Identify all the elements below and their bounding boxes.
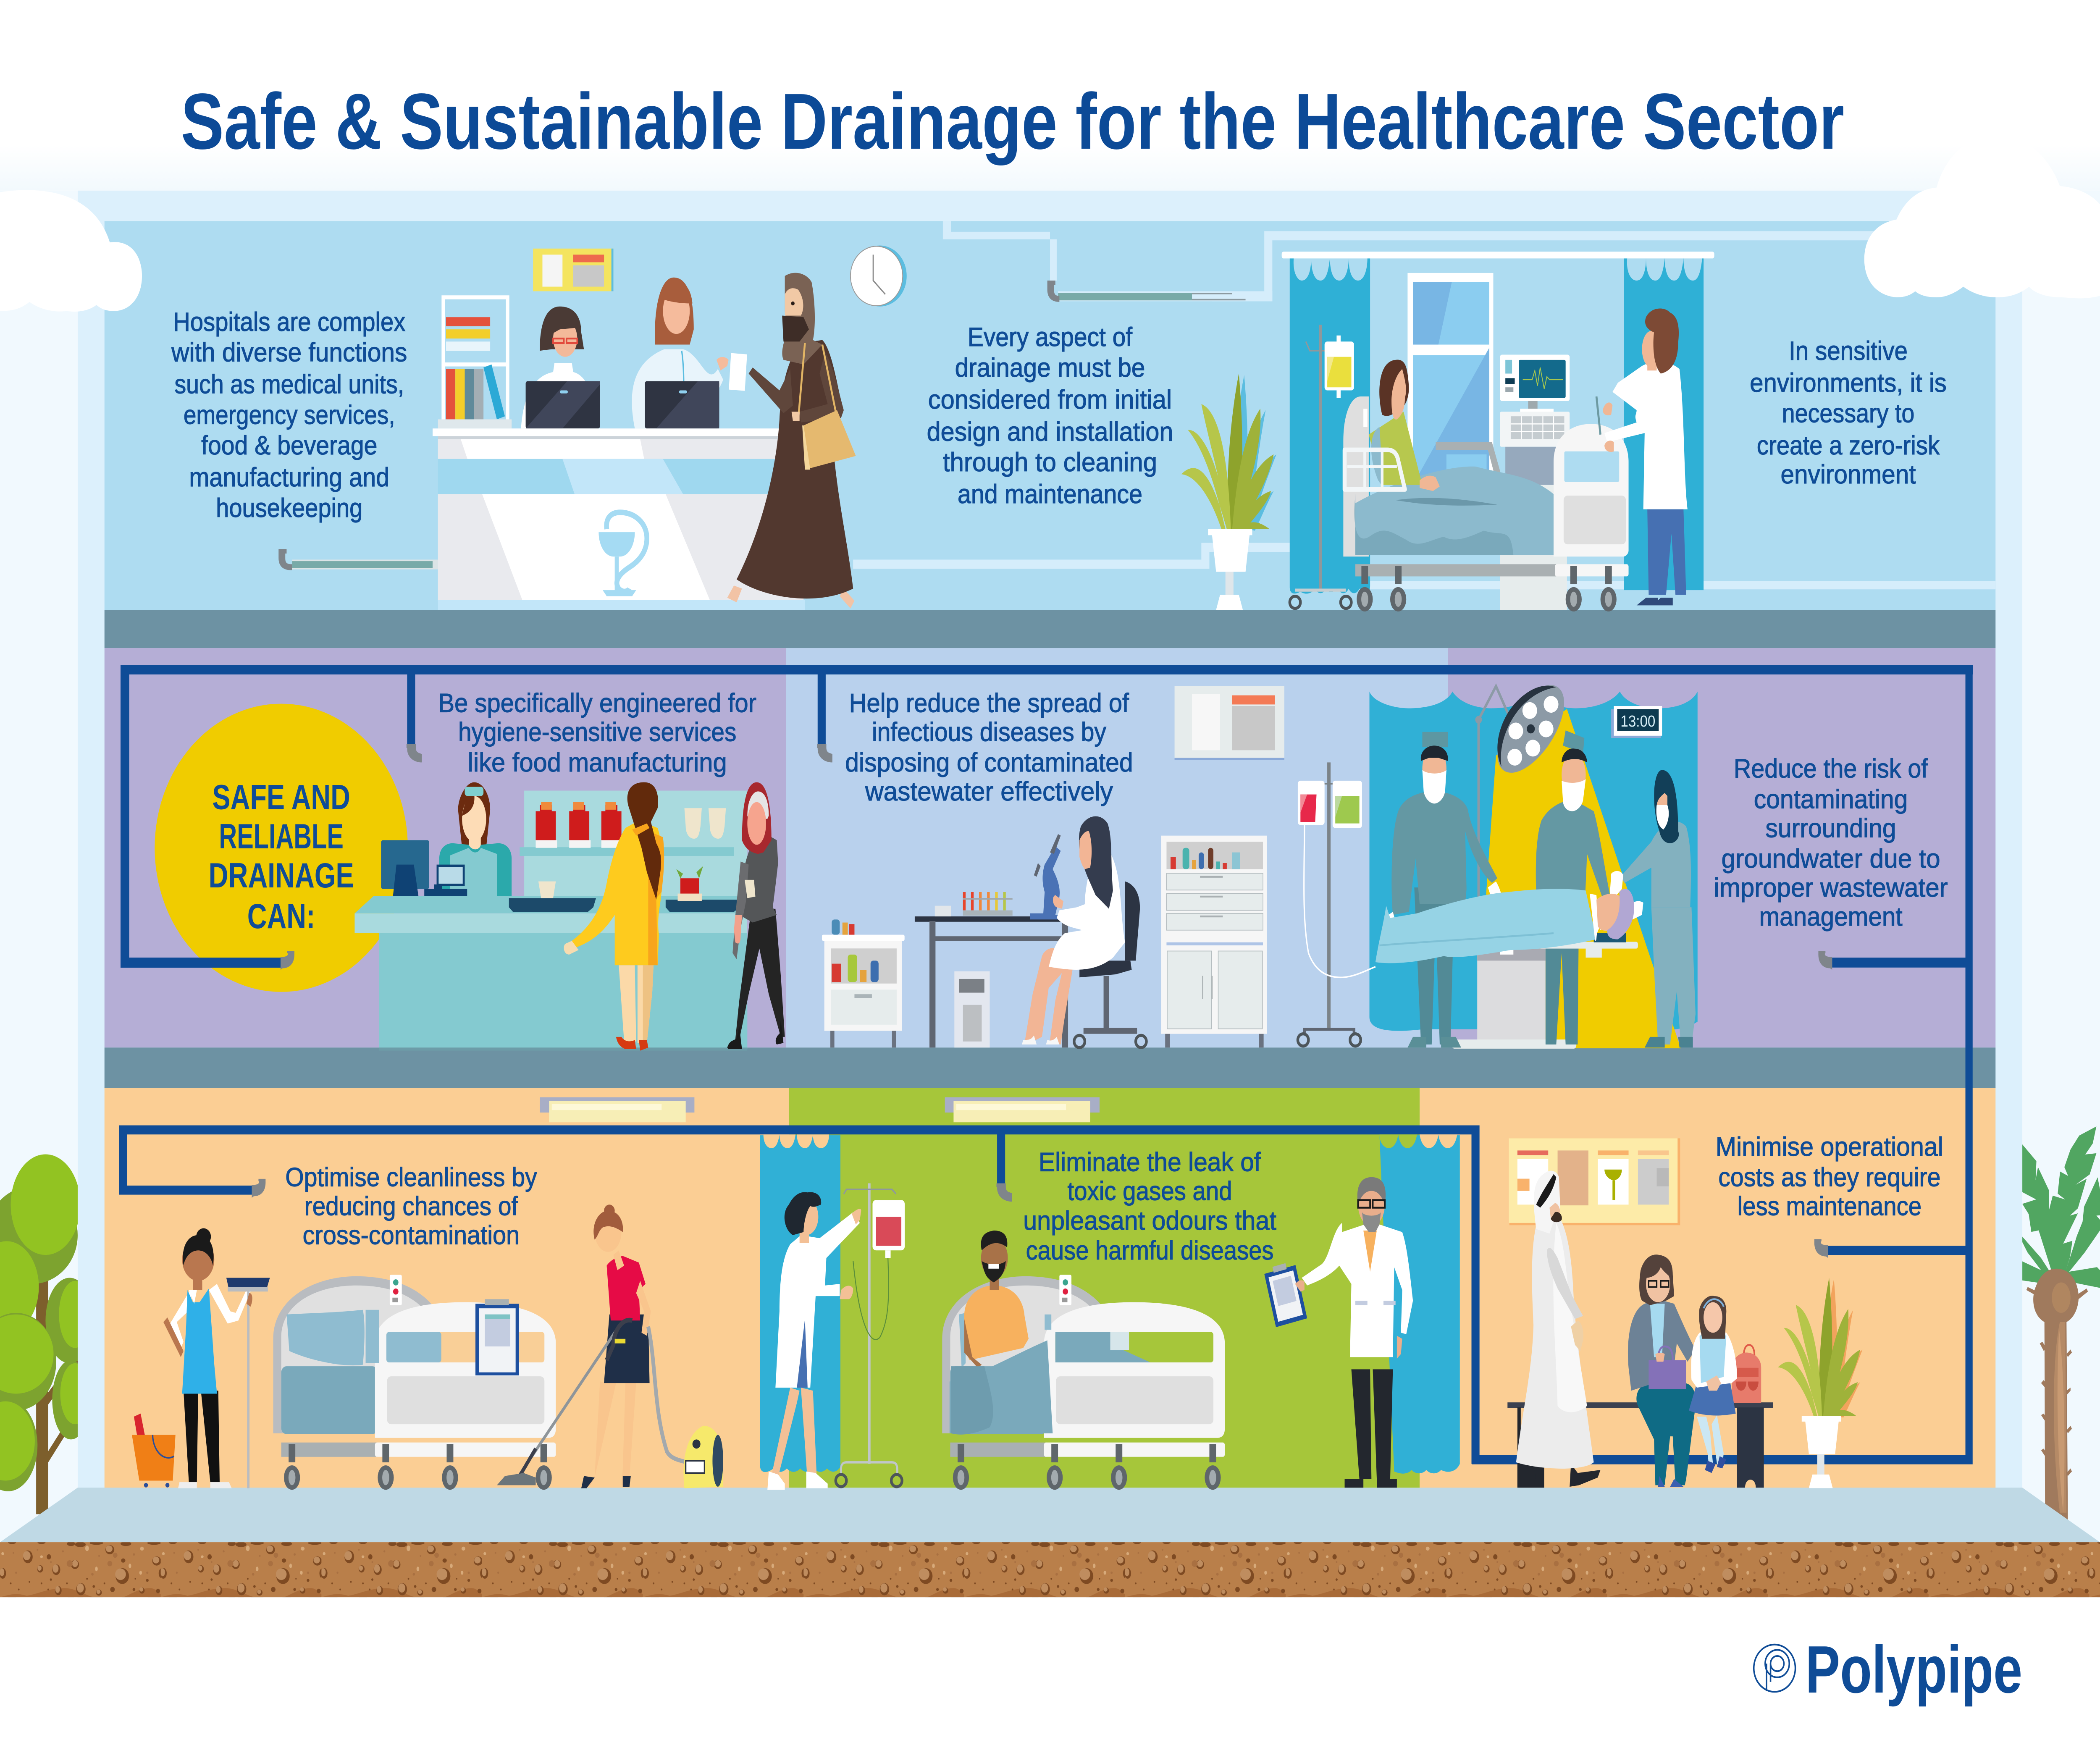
text: infectious diseases <box>845 688 1133 806</box>
ground pavement <box>0 1488 2100 1542</box>
woman vacuuming <box>497 1205 695 1488</box>
text: minimise: Minimise operational <box>1716 1132 1943 1162</box>
bed details left <box>286 1275 544 1375</box>
text: engineered: like food manufacturing <box>468 748 727 777</box>
text: eliminate: cause harmful diseases <box>1026 1236 1274 1265</box>
text: engineered: Be specifically engineered for <box>438 688 756 718</box>
text: sensitive environments: In sensitive <box>1789 336 1908 366</box>
panel: bottom floor rooms <box>105 1087 1995 1488</box>
patient <box>1369 360 1440 491</box>
bucket <box>132 1414 176 1488</box>
monitors <box>526 381 719 428</box>
patient ward scene <box>760 1134 1460 1490</box>
clipboard <box>1263 1261 1307 1327</box>
callout: yellow circle: SAFE AND <box>212 777 350 817</box>
cash register and monitor <box>381 840 467 901</box>
nurse with dark hair <box>767 1192 861 1490</box>
receptionist left <box>521 307 598 428</box>
text: hospitals: Hospitals are complex <box>173 307 406 337</box>
text: groundwater: Reduce the risk of <box>1734 753 1928 783</box>
surgeon right <box>1536 730 1614 1044</box>
icon: top floor pipe left <box>278 549 438 570</box>
text: optimise: reducing chances of <box>304 1191 518 1221</box>
text: every aspect: drainage must be <box>955 352 1145 383</box>
left curtain <box>760 1134 840 1472</box>
callout: yellow circle <box>121 704 408 992</box>
text: every aspect: design and installation <box>927 417 1173 446</box>
icon: plant waiting area <box>1778 1278 1863 1488</box>
clock <box>850 246 907 307</box>
receptionist right <box>632 278 729 428</box>
callout: yellow circle: CAN: <box>247 897 315 936</box>
callout: yellow circle: DRAINAGE <box>209 856 354 895</box>
seated girl <box>1689 1296 1737 1473</box>
cleaning scene <box>132 1205 723 1490</box>
text: groundwater: contaminating <box>1754 784 1908 814</box>
footboard <box>1554 424 1629 556</box>
text: eliminate: unpleasant odours that <box>1023 1206 1276 1236</box>
icon: bowl of hygieia <box>598 512 647 596</box>
small cart <box>822 919 905 1047</box>
bed pillar <box>1500 491 1567 610</box>
icon: IV stand with yellow bag <box>1290 325 1354 609</box>
text: groundwater: groundwater due to <box>1722 844 1940 874</box>
PC tower <box>954 971 990 1047</box>
text: hospitals: manufacturing and <box>189 462 389 492</box>
ward bed right <box>942 1276 1225 1490</box>
right curtain <box>1379 1134 1460 1474</box>
waiting area scene <box>1507 1138 1863 1488</box>
curtains <box>1282 252 1714 593</box>
icon: IV stand with two bags <box>1298 762 1376 1046</box>
text: hospitals: such as medical units, <box>174 369 404 399</box>
reception scene <box>433 246 907 610</box>
text: every aspect: Every aspect of <box>968 322 1132 352</box>
clouds <box>0 134 2100 312</box>
theatre curtain <box>1370 692 1698 1031</box>
theatre lamp <box>1475 669 1577 906</box>
trays <box>509 866 738 912</box>
floor slabs <box>105 610 1995 1088</box>
text: minimise <box>1716 1132 1943 1221</box>
icon: IV stand with blood bag <box>836 1183 905 1487</box>
backpack <box>1732 1345 1761 1403</box>
text: eliminate: Eliminate the leak of <box>1039 1147 1261 1177</box>
customer in yellow dress <box>564 782 664 1051</box>
wall notice board <box>1175 686 1284 760</box>
chair <box>1074 882 1147 1047</box>
back cabinet <box>520 791 747 897</box>
text: minimise: costs as they require <box>1718 1162 1941 1192</box>
text: groundwater: surrounding <box>1765 813 1896 843</box>
text: sensitive environments: environments, it is <box>1750 368 1947 398</box>
drainage pipe network <box>119 665 1973 1464</box>
text: hospitals: food & beverage <box>201 430 377 460</box>
yellow light beam <box>1485 709 1681 1048</box>
nurse with syringe <box>1596 308 1688 605</box>
window <box>1407 273 1493 486</box>
patient on operating table <box>1376 889 1638 963</box>
text: engineered <box>438 688 756 777</box>
text: optimise: cross-contamination <box>303 1220 520 1250</box>
operating theatre scene <box>1298 669 1698 1049</box>
pipe elbows <box>252 744 1832 1258</box>
text: groundwater <box>1714 753 1948 932</box>
notice board peach <box>1509 1138 1680 1225</box>
text: groundwater: management <box>1759 901 1903 932</box>
building: walls and roof band <box>78 191 2022 1488</box>
vacuum cleaner <box>683 1426 723 1488</box>
canteen scene <box>354 782 785 1051</box>
text: optimise: Optimise cleanliness by <box>285 1162 537 1192</box>
patient bed <box>1343 360 1629 611</box>
cleaner <box>163 1228 270 1488</box>
callout: yellow circle: RELIABLE <box>219 817 344 856</box>
text: engineered: hygiene-sensitive services <box>458 717 736 747</box>
text: every aspect <box>927 322 1173 509</box>
text: sensitive environments: create a zero-risk <box>1757 430 1940 460</box>
bench <box>1507 1402 1773 1488</box>
icon: logo mark <box>1754 1645 1796 1692</box>
ward room scene <box>1282 252 1714 611</box>
text: eliminate: toxic gases and <box>1067 1176 1232 1206</box>
notice board <box>533 249 613 291</box>
cashier <box>439 782 512 898</box>
laboratory scene <box>822 686 1284 1047</box>
nurse in theatre <box>1610 770 1696 1047</box>
title: Safe & Sustainable Drainage for the Healthcare Sector <box>181 77 1844 165</box>
digital clock <box>1611 706 1662 738</box>
ward bed left <box>273 1276 556 1490</box>
text: every aspect: and maintenance <box>958 479 1142 509</box>
text: hospitals: with diverse functions <box>171 337 407 367</box>
icon: tree <box>0 1154 94 1514</box>
reception counter <box>433 428 805 610</box>
icon: palm tree <box>2022 1126 2100 1520</box>
visitor in abaya <box>727 273 856 609</box>
duct outlines <box>853 221 1995 589</box>
text: eliminate <box>1023 1147 1276 1265</box>
text: every aspect: through to cleaning <box>943 447 1157 477</box>
side rail <box>1345 450 1405 489</box>
patient in bed with beard <box>950 1231 1213 1435</box>
seated woman with glasses <box>1628 1254 1696 1487</box>
text: sensitive environments <box>1750 336 1947 489</box>
text: sensitive environments: environment <box>1780 459 1916 489</box>
counter <box>354 896 747 1051</box>
man in white thobe <box>1516 1171 1601 1487</box>
panel: top floor room <box>105 221 1995 610</box>
icon: plant top floor <box>1181 374 1276 610</box>
text: infectious diseases: Help reduce the spread of <box>849 688 1129 718</box>
surgeon left <box>1386 732 1502 1047</box>
ceiling lights <box>540 1097 1100 1122</box>
text: groundwater: improper wastewater <box>1714 872 1948 903</box>
desk with microscope and tubes <box>915 834 1082 1047</box>
text: infectious diseases: wastewater effectively <box>865 777 1113 806</box>
operating table pedestal <box>1452 948 1576 1049</box>
customer in hijab <box>727 782 785 1049</box>
text: every aspect: considered from initial <box>928 385 1172 415</box>
text: infectious diseases: infectious diseases by <box>872 717 1106 747</box>
text: sensitive environments: necessary to <box>1782 398 1914 428</box>
storage cabinet <box>1161 836 1267 1047</box>
digital clock: 13:00 <box>1620 712 1655 730</box>
soil strip <box>0 1542 2100 1597</box>
text: hospitals: housekeeping <box>216 493 362 523</box>
icon: top floor pipe centre <box>1047 281 1272 302</box>
text: hospitals <box>171 307 407 523</box>
text: infectious diseases: disposing of contaminated <box>845 748 1133 777</box>
panel: middle floor rooms <box>105 648 1995 1047</box>
text: hospitals: emergency services, <box>184 400 395 430</box>
doctor with beard <box>1295 1177 1413 1488</box>
shelf with binders <box>438 297 512 428</box>
patient monitor and keyboard <box>1493 355 1570 497</box>
text: minimise: less maintenance <box>1738 1191 1922 1221</box>
logo: Polypipe: Polypipe <box>1805 1632 2022 1707</box>
text: optimise <box>285 1162 537 1250</box>
scientist <box>1022 816 1125 1044</box>
